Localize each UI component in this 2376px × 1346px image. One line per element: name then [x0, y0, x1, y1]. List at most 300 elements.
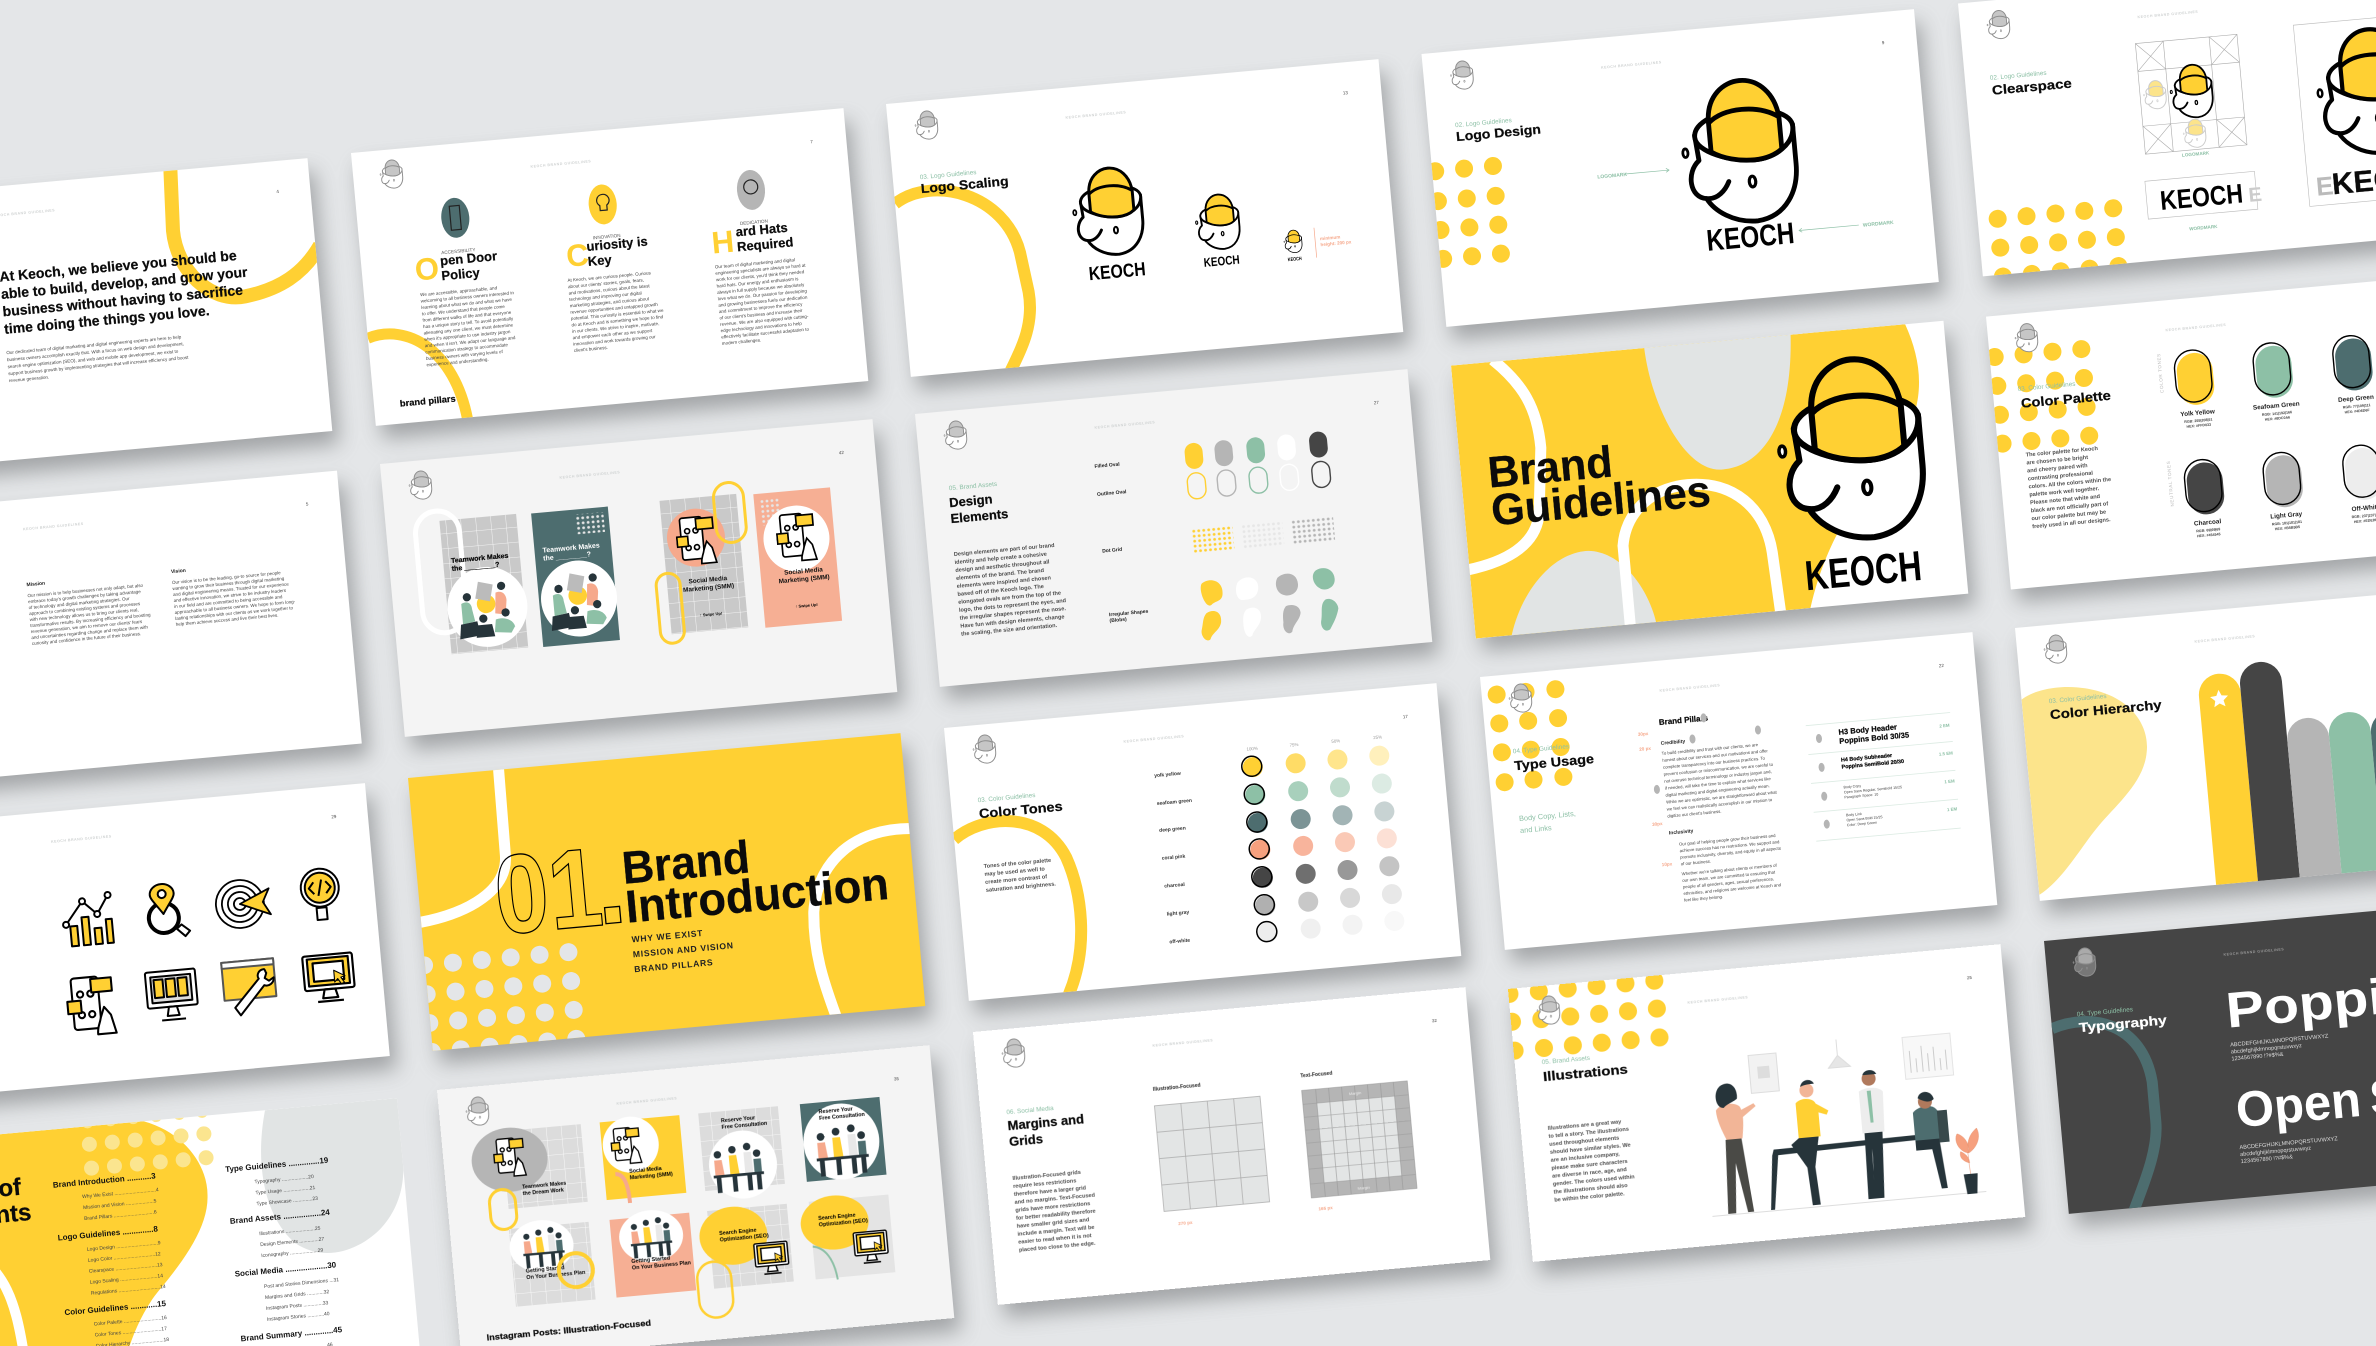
chart: text focused grid: Margin [1357, 1185, 1370, 1191]
section list: WHY WE EXIST [631, 928, 704, 944]
contents list: right column: Margins and Grids ............32 [265, 1289, 330, 1301]
panel: instagram posts slide: 35 [894, 1076, 900, 1082]
sample: brand pillars text: if needed, will take the time to explain what services like [1665, 776, 1772, 791]
tone headers: 50% [1331, 738, 1340, 744]
logo: medium [1193, 193, 1243, 270]
section list: BRAND PILLARS [634, 957, 714, 974]
body text: elements of the brand. The brand [956, 568, 1045, 582]
body text: are diverse in race, age, and [1552, 1167, 1628, 1180]
body text: colors. All the colors within the [2028, 477, 2111, 490]
swatch: yolk yellow [2173, 348, 2218, 429]
pillar: hard hats required: Required [736, 234, 794, 254]
heading: margins and grids: 06. Social Media [1006, 1105, 1054, 1116]
icon: location pin with magnifier [146, 882, 191, 939]
post: seo pale: Optimization (SEO) [819, 1218, 868, 1228]
panel: clearspace slide: KEOCH BRAND GUIDELINES [2137, 10, 2198, 19]
post: seo gray: Optimization (SEO) [720, 1233, 769, 1243]
labels: element names: Irregular Shapes [1109, 609, 1149, 618]
panel: color tones slide: 17 [1403, 714, 1409, 719]
story card: social media gray: Social Media [688, 575, 728, 586]
sample: brand pillars text: Our goal of helping people grow their business and [1679, 833, 1776, 847]
heading: design elements [948, 480, 1009, 526]
heading: margins and grids: Grids [1008, 1131, 1044, 1149]
swatch: charcoal [2183, 458, 2228, 539]
pillar: hard hats required: modern challenges. [722, 337, 762, 346]
icon: gray logo [2014, 323, 2039, 353]
panel: color tones slide: KEOCH BRAND GUIDELINES [1123, 734, 1184, 744]
post: seo pale [798, 1191, 896, 1282]
contents list: right column: Iconography ....................29 [261, 1247, 324, 1259]
panel: logo design slide: 9 [1882, 40, 1885, 45]
heading: color hierarchy: Color Hierarchy [2049, 697, 2163, 722]
heading: color tones: 03. Color Guidelines [977, 792, 1036, 804]
post: consultation gray: Reserve Your [721, 1115, 756, 1124]
text block: vision: Our vision is to be the leading, go-to source for people [172, 570, 281, 585]
type scale table: H3 Body Header [1838, 722, 1897, 737]
sample: brand pillars text: honest about our services and our motivations and offer [1662, 748, 1769, 763]
icon: phone [65, 975, 117, 1037]
text block: vision: lasting relationships with our clients as we work together to [175, 605, 294, 621]
spacing notes: 10px [1662, 861, 1673, 867]
pillar: curiosity is key: uriosity is [586, 234, 648, 254]
pillar: open door policy: to offer. We understand that people come [422, 304, 505, 316]
text block: vision [170, 568, 295, 626]
story card: social media gray [647, 481, 756, 644]
heading: color hierarchy [2049, 688, 2163, 722]
text block: mission [26, 582, 150, 645]
text block: mission: approach to combining existing systems and processes [29, 601, 141, 616]
post: getting started coral [609, 1207, 696, 1298]
subheading: body copy: and Links [1520, 823, 1552, 835]
heading: design elements: 05. Brand Assets [949, 481, 997, 492]
labels: color names: yolk yellow [1154, 771, 1181, 779]
swatch: deep green: Deep Green [2338, 394, 2374, 404]
story card: social media coral: Social Media [784, 566, 824, 577]
icon: gray logo [465, 1096, 490, 1126]
contents list: right column: Typography ...................20 [254, 1174, 314, 1185]
contents list: right column: Type Showcase ..............23 [256, 1196, 318, 1207]
chart: illustration focused grid: 270 px [1178, 1220, 1193, 1226]
panel: illustrations slide: 25 [1967, 975, 1973, 980]
number: 01 outline: 01 [489, 824, 607, 958]
panel: brand guidelines cover slide [1449, 319, 1969, 642]
panel: instagram stories slide: 42 [839, 450, 845, 455]
pillar: curiosity is key: and motivations, curious about the latest [568, 283, 651, 296]
pillar: curiosity is key: INNOVATION [593, 233, 621, 240]
post: social media yellow: Social Media [629, 1166, 663, 1175]
contents list: left column: Clearspace ..............................13 [89, 1262, 163, 1275]
panel: instagram posts slide [437, 1045, 954, 1346]
contents list: left column: Logo Scaling ...........................14 [90, 1273, 163, 1286]
heading: color hierarchy: 03. Color Guidelines [2049, 693, 2107, 705]
specimen: poppins: abcdefghijklmnopqrstuvwxyz [2231, 1043, 2302, 1056]
panel: type usage slide: 22 [1939, 663, 1945, 668]
pillar: hard hats required: revenue. We are also equipped with cutting- [720, 314, 809, 327]
panel: brand pillars slide [351, 108, 868, 428]
heading: belief statement: At Keoch, we believe you should be [0, 247, 237, 285]
labels: element names: (Blobs) [1109, 617, 1127, 624]
body text: to tell a story. The illustrations [1548, 1127, 1629, 1140]
pillar: curiosity is key: Key [587, 252, 613, 269]
text block: mission: transformative results. By increasing efficiency and boosting [30, 612, 151, 628]
heading: type usage [1513, 741, 1595, 773]
panel: design elements slide [915, 369, 1432, 687]
panel: instagram stories slide [380, 419, 897, 737]
body text: Illustration-Focused grids [1012, 1170, 1081, 1182]
pillar: hard hats required: edge technology and innovations to help [720, 321, 802, 333]
post: consultation green [800, 1097, 887, 1183]
pillar: open door policy: from different walks of life and that everyone [422, 310, 512, 323]
panel: design elements slide: KEOCH BRAND GUIDELINES [1094, 420, 1155, 430]
body text: palette work well together. [2029, 486, 2100, 498]
wordmark: keoch: KEOCH [1803, 542, 1924, 599]
body text: Have fun with design elements, change [960, 614, 1065, 630]
pillar: hard hats required: Our team of digital marketing and digital [715, 257, 795, 269]
swatch: seafoam green: RGB: 141|192|166 [2262, 410, 2292, 417]
pillar: hard hats required: effectively facilitate successful adaptation to [721, 327, 810, 340]
text block: vision: and digital engineering means. Trusted for our experience [173, 581, 290, 597]
diagram: logomark clearspace [2135, 34, 2248, 161]
label: minimum height: height: 200 px [1320, 239, 1352, 247]
post: seo gray [691, 1202, 796, 1319]
heading: clearspace: Clearspace [1991, 76, 2072, 98]
panel: brand pillars slide: KEOCH BRAND GUIDELINES [530, 159, 591, 169]
diagram: wordmark clearspace: KEOCH [2159, 179, 2244, 216]
story card: teamwork green: Teamwork Makes [542, 542, 600, 555]
pillar: curiosity is key: and empower each other as we support [572, 328, 653, 340]
contents list: left column [53, 1171, 173, 1346]
post: social media yellow: Marketing (SMM) [630, 1171, 673, 1181]
label: instagram posts: Instagram Posts: Illustration-Focused [486, 1318, 651, 1342]
type scale table: 2 EM [1939, 723, 1950, 729]
body text: our color palette but may be [2031, 510, 2106, 522]
icon: gray logo [1986, 10, 2011, 40]
panel: logo design slide [1416, 9, 1939, 327]
diagram: wordmark clearspace: WORDMARK [2189, 224, 2218, 231]
panel: icon set slide: 29 [331, 814, 337, 819]
label: minimum height: minimum [1320, 234, 1341, 241]
tone headers: 75% [1289, 742, 1299, 748]
story card: social media coral [753, 487, 842, 628]
body text: easier to read when it is not [1018, 1233, 1092, 1246]
specimen: open sans [2234, 1059, 2376, 1165]
pillar: curiosity is key: do at Keoch and is something we hope to find [571, 314, 664, 328]
pillar: hard hats required: always in full supply because we absolutely [717, 282, 805, 295]
type scale table [1806, 713, 1961, 841]
icon: gray logo [1449, 60, 1474, 90]
contents list: left column: Logo Color ..............................12 [88, 1251, 161, 1264]
spacing notes: 30px [1652, 821, 1663, 827]
sample: brand pillars text: promote inclusivity, diversity, and equity in all aspects [1680, 846, 1781, 860]
text block: vision: in our field and are committed to being accessible and [174, 594, 283, 609]
body text: Our dedicated team of digital marketing and digital engineering experts are here to help [6, 334, 182, 355]
pillar: open door policy: Policy [441, 265, 481, 283]
chart: text focused grid: Margin [1349, 1090, 1361, 1096]
logo: main mark: KEOCH [1705, 217, 1796, 258]
body text: contrasting professional [2028, 471, 2094, 482]
body text: Tones of the color palette [983, 858, 1051, 870]
body text: for better readability therefore [1016, 1209, 1096, 1222]
swatch: yolk yellow: RGB: 255|208|51 [2184, 418, 2213, 424]
text block: vision: and effective innovation, we strive to be industry leaders [173, 588, 287, 603]
body text: therefore have a larger grid [1014, 1185, 1087, 1198]
post: consultation green: Reserve Your [818, 1106, 854, 1115]
filled ovals [1184, 431, 1329, 470]
panel: margins and grids slide: 32 [1432, 1018, 1438, 1023]
diagram: wordmark clearspace: E [2248, 184, 2263, 207]
contents list: right column: Brand Assets .................24 [230, 1208, 331, 1226]
post: teamwork gray: the Dream Work [523, 1187, 564, 1197]
spacing notes [1638, 730, 1673, 868]
type scale table: Color: Deep Green [1847, 821, 1877, 827]
contents list: left column: Why We Exist ..............................4 [82, 1187, 159, 1200]
panel: clearspace slide [1958, 0, 2376, 287]
body text: the scaling, the size and orientation. [961, 623, 1058, 638]
post: getting started coral: Getting Started [631, 1256, 670, 1265]
diagram: wordmark clearspace [2145, 171, 2265, 235]
heading: belief statement: business without having to sacrifice [2, 282, 244, 319]
body text: search engine optimization (SEO), and web and mobile app development, we exist to [7, 349, 179, 369]
callout: wordmark: WORDMARK [1863, 220, 1894, 229]
contents list: right column: Brand Summary .............45 [240, 1325, 343, 1343]
post: teamwork gray [469, 1121, 590, 1232]
pillar: curiosity is key: innovation and work towards growing our [573, 334, 656, 347]
type scale table: Poppins SemiBold 20/30 [1841, 759, 1904, 771]
contents list: right column: Instagram Stories ............40 [267, 1311, 330, 1323]
section list: MISSION AND VISION [632, 940, 734, 959]
contents list: left column: Color Guidelines ............15 [64, 1299, 167, 1317]
logo: large [1069, 165, 1148, 286]
spacing notes: 20 px [1639, 746, 1652, 752]
sample: brand pillars text: feel like they belong. [1684, 894, 1723, 903]
sample: brand pillars text: Brand Pillars [1658, 713, 1709, 727]
heading: logo design: 02. Logo Guidelines [1455, 117, 1512, 129]
logo: small: KEOCH [1288, 256, 1302, 263]
panel: mission statement slide [0, 156, 337, 476]
contents list: left column: Regulations ..............................14 [91, 1284, 166, 1297]
heading: illustrations: Illustrations [1542, 1062, 1628, 1084]
panel: mission and vision slide: 5 [306, 501, 309, 507]
type scale table: 1.5 EM [1939, 750, 1953, 757]
pillar: hard hats required: and commitment to improve the efficiency [719, 301, 803, 314]
text block: mission: with new technology allows us to bring our clients real, [29, 607, 139, 622]
text block: mission: Our mission is to help businesses not only adapt, but also [27, 583, 144, 598]
diagram: combination clearspace [2293, 12, 2376, 221]
story card: teamwork green [531, 506, 621, 647]
logo: large head [1771, 354, 1929, 545]
panel: illustrations slide [1500, 940, 2025, 1263]
heading: logo design: Logo Design [1455, 122, 1542, 144]
story card: social media coral: ↑ Swipe Up! [795, 602, 818, 609]
icon: monitor with cursor [302, 952, 356, 1003]
body text: be within the color palette. [1554, 1191, 1625, 1204]
heading: illustrations [1542, 1052, 1628, 1084]
specimen: open sans: abcdefghijklmnopqrstuvwxyz [2240, 1146, 2312, 1158]
body text: freely used in all our designs. [2032, 517, 2111, 530]
title: brand guidelines: Brand [1486, 437, 1615, 498]
text block: mission: embrace today's growth challenges by taking advantage [28, 589, 141, 604]
text block: mission: Mission [26, 581, 45, 588]
swatch: yolk yellow: Yolk Yellow [2180, 408, 2215, 418]
icon: gray logo [1536, 995, 1561, 1025]
post: social media yellow [599, 1112, 687, 1205]
body text: require less restrictions [1013, 1178, 1077, 1190]
icon: gray logo [914, 110, 939, 140]
contents list: right column: Instagram Posts ..............33 [266, 1300, 329, 1312]
body text: saturation and brightness. [986, 881, 1057, 894]
contents list: left column: Logo Guidelines ..............8 [57, 1224, 159, 1242]
body text: the irregular shapes represent the nose. [959, 606, 1067, 622]
pillar: open door policy: ACCESSIBILITY [441, 247, 476, 255]
chart: text focused grid: 165 px [1318, 1205, 1333, 1211]
annotation markers [1647, 703, 1830, 844]
body text: are chosen to be bright [2026, 455, 2088, 467]
body text: Please note that white and [2030, 494, 2101, 506]
pillar: hard hats required: and growing businesses fuels our dedication [718, 295, 808, 308]
swatch: deep green [2331, 334, 2376, 415]
text block: mission: curiosity and confidence in the future of their business. [32, 631, 141, 646]
story card: social media gray: Marketing (SMM) [683, 582, 734, 594]
pillar: open door policy: welcoming to all business owners interested in [420, 290, 515, 304]
post: consultation gray: Free Consultation [721, 1121, 768, 1131]
heading: color palette [2017, 378, 2111, 411]
post: getting started gray [507, 1216, 596, 1307]
swatch: yolk yellow: HEX: #FFD033 [2186, 423, 2211, 429]
panel: instagram stories slide: KEOCH BRAND GUIDELINES [559, 470, 620, 480]
logo: medium: KEOCH [1203, 253, 1240, 270]
body text: may be used as well to [984, 866, 1046, 878]
contents list: left column: Color Tones ............................17 [94, 1326, 167, 1339]
specimen: open sans: ABCDEFGHIJKLMNOPQRSTUVWXYZ [2239, 1136, 2339, 1151]
story card: teamwork gray: Teamwork Makes [451, 553, 509, 565]
label: minimum height [1314, 224, 1353, 258]
icon: gray logo [2043, 634, 2068, 664]
pillar: hard hats required: H [710, 224, 736, 261]
sample: brand pillars text [1658, 708, 1787, 903]
contents list: right column: Post and Stories Dimensions ...31 [264, 1277, 340, 1290]
heading: type usage: Type Usage [1514, 751, 1595, 773]
pillar: hard hats required: hard hats. Our energy and enthusiasm is [716, 276, 799, 289]
logo: small [1283, 229, 1304, 263]
heading: belief statement: able to build, develop, and grow your [0, 264, 249, 302]
swatch: light gray: RGB: 181|181|181 [2272, 520, 2302, 527]
post: getting started gray: Getting Started [526, 1265, 565, 1275]
contents list: right column: Illustrations .....................25 [259, 1226, 321, 1237]
panel: margins and grids slide [973, 987, 1490, 1305]
panel: color palette slide [1982, 272, 2376, 590]
swatch: seafoam green [2247, 341, 2301, 423]
type scale table: Open Sans Regular, Semibold 15/25 [1844, 785, 1902, 794]
pillar: curiosity is key: C [565, 237, 590, 274]
heading: typography: Typography [2078, 1012, 2168, 1035]
body text: grids have more restrictions [1015, 1201, 1091, 1214]
icon: gray logo [1001, 1038, 1026, 1068]
sample: brand pillars text: Whether we're talking about clients or members of [1681, 863, 1778, 876]
panel: illustrations slide: KEOCH BRAND GUIDELINES [1687, 995, 1748, 1005]
contents list: left column: Color Palette ...........................16 [93, 1315, 167, 1328]
specimen: open sans: Open [2234, 1071, 2363, 1138]
body text: include a margin. Text will be [1017, 1225, 1095, 1238]
pillar: open door policy: communication strategy to accommodate [425, 342, 509, 355]
text block: vision: wanting to grow their business through digital marketing [172, 576, 285, 591]
labels: element names [1094, 460, 1149, 624]
labels: color names: seafoam green [1156, 798, 1192, 807]
label: brand pillars: brand pillars [399, 394, 456, 409]
labels: color names: light gray [1167, 910, 1190, 918]
pillar: hard hats required: engineering specialists are always so hard at [715, 263, 806, 276]
type scale table: 1 EM [1947, 806, 1958, 812]
body text: revenue generation. [9, 375, 49, 383]
panel: instagram posts slide: KEOCH BRAND GUIDELINES [616, 1096, 677, 1106]
heading: clearspace: 02. Logo Guidelines [1990, 70, 2047, 82]
body text: have smaller grid sizes and [1017, 1217, 1090, 1230]
pillar: open door policy: alienating any one client, we must determine [423, 322, 514, 336]
sample: brand pillars text: of our business. [1681, 859, 1711, 866]
sample: brand pillars text: prevent confusion or miscommunication, we are careful to [1663, 762, 1774, 777]
contents list: right column [225, 1156, 346, 1346]
labels: color names [1154, 770, 1205, 945]
story card: teamwork gray [414, 504, 531, 657]
story card: social media gray: ↑ Swipe Up! [700, 611, 722, 618]
logo: main mark [1677, 76, 1804, 259]
text block: vision: approachable to all business owners. We hope to form long- [174, 599, 296, 615]
panel: color hierarchy slide [2015, 583, 2376, 943]
pillar: curiosity is key: revenue opportunities and untapped growth [570, 302, 658, 315]
pillar: curiosity is key: technology and improving our digital [569, 290, 642, 302]
sample: brand pillars text: complete transparency into our business practices. To [1663, 755, 1766, 770]
specimen: open sans: 1234567890 !?#$%& [2241, 1154, 2293, 1165]
pillar: open door policy: experience and understanding. [426, 357, 489, 367]
sample: brand pillars text: Credibility [1661, 739, 1686, 747]
dot grids [1191, 516, 1335, 553]
body text: create more contrast of [985, 874, 1048, 886]
chart: illustration focused grid [1153, 1077, 1271, 1227]
pillar: open door policy: has a unique story to tell. To avoid potentially [423, 316, 514, 329]
labels: color names: off-white [1169, 938, 1191, 945]
type scale table: Body Link [1846, 812, 1862, 817]
post: getting started gray: On Your Business Plan [526, 1270, 586, 1281]
pillar: hard hats required: love what we do. Our passion for developing [718, 288, 808, 301]
story card: teamwork gray: the ________? [452, 562, 500, 573]
swatch: light gray: Light Gray [2270, 511, 2303, 521]
panel: type usage slide [1480, 632, 1997, 950]
type scale table: Poppins Bold 30/35 [1839, 730, 1910, 746]
panel: design elements slide: 27 [1374, 400, 1380, 405]
panel: logo scaling slide: 13 [1343, 90, 1349, 96]
type scale table: Paragraph Space: 10 [1844, 792, 1878, 799]
heading: belief statement: time doing the things you love. [3, 302, 210, 337]
title: brand guidelines: Guidelines [1489, 467, 1713, 535]
pillar: open door policy: business owners with varying levels of [426, 349, 504, 361]
body text: business owners accomplish exactly that. With a focus on web design and development, [7, 341, 184, 362]
post: consultation gray [698, 1106, 786, 1202]
heading: color palette: 03. Color Guidelines [2017, 381, 2076, 393]
type scale table: Open Sans Bold 15/25 [1846, 815, 1883, 822]
contents list: left column: Brand Pillars .............................6 [84, 1209, 157, 1222]
body text: elongated ovals are from the top of the [958, 591, 1061, 606]
panel: mission and vision slide [0, 471, 362, 788]
specimen: poppins: 1234567890 !?#$%& [2231, 1052, 2284, 1062]
pillar: curiosity is key: about our clients' stories, goals, fears, [568, 277, 644, 289]
panel: logo design slide: KEOCH BRAND GUIDELINES [1601, 60, 1662, 70]
labels: color names: deep green [1159, 826, 1186, 834]
tone headers: 100% [1246, 746, 1258, 752]
pillar: hard hats required: of our client's business and increase their [719, 308, 803, 320]
pillar: open door policy: We are accessible, approachable, and [420, 285, 498, 297]
type scale table: Body Copy [1843, 784, 1861, 790]
body text: placed too close to the edge. [1019, 1241, 1096, 1254]
callout: wordmark [1799, 220, 1894, 234]
